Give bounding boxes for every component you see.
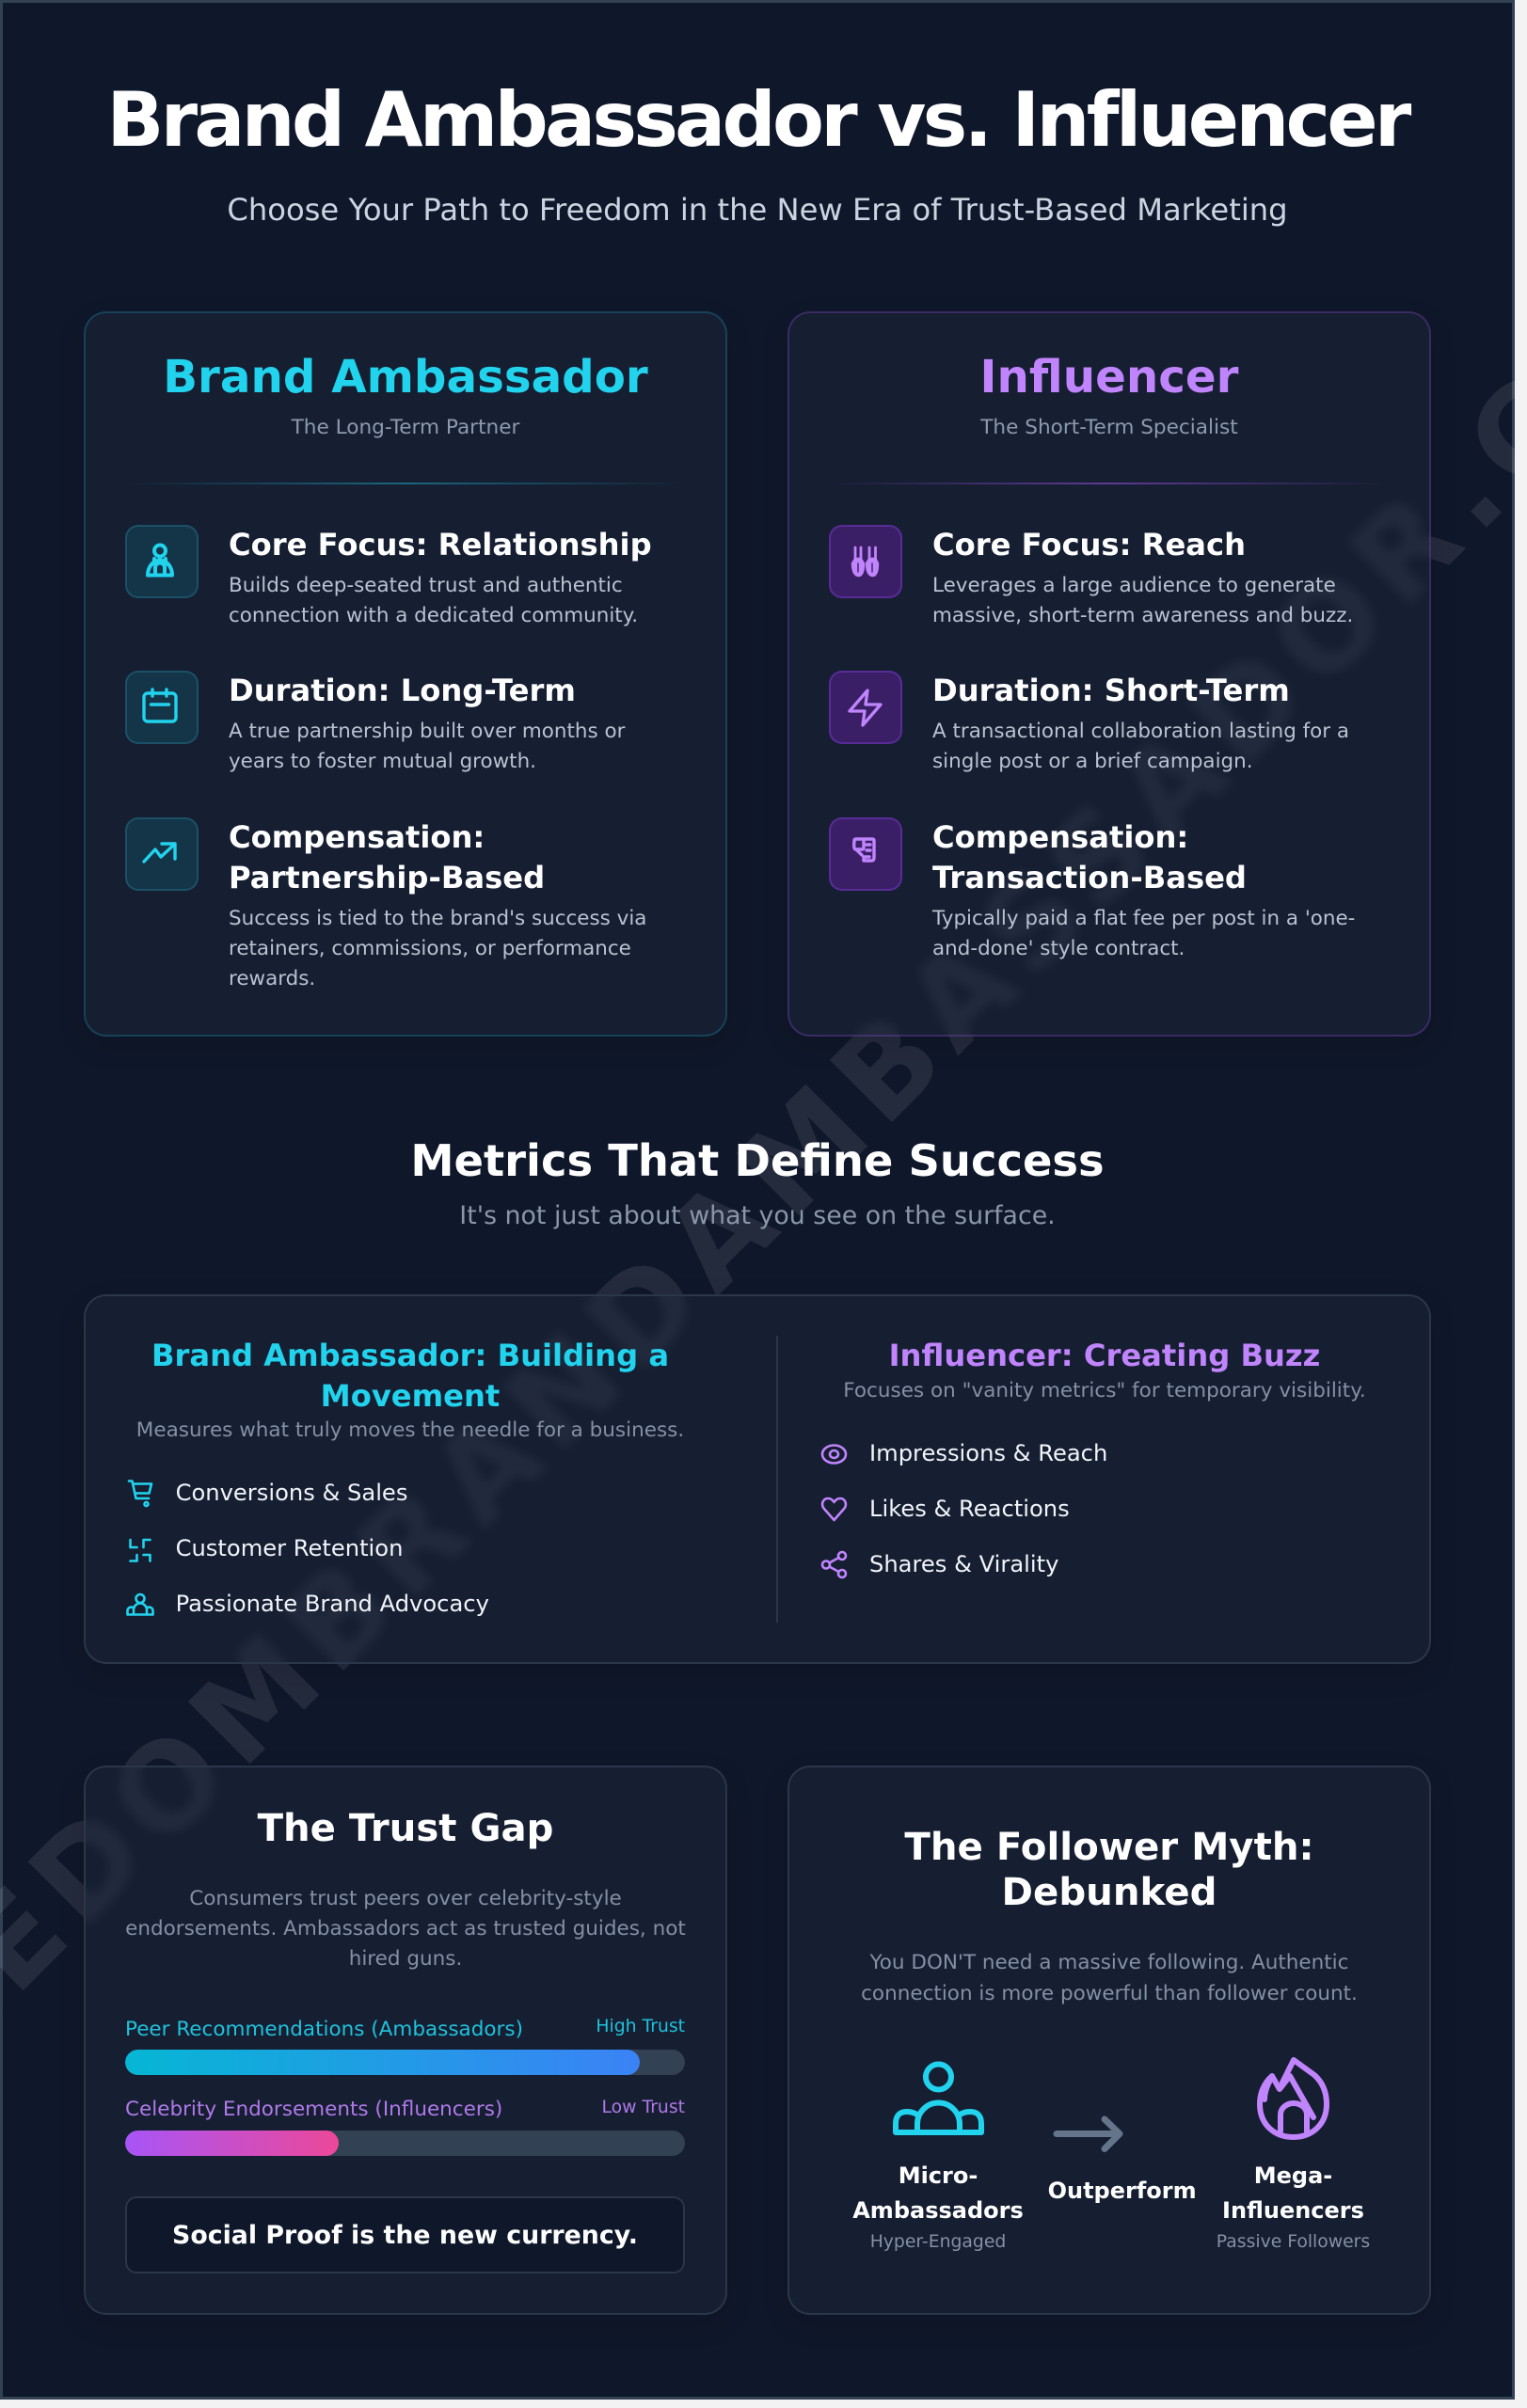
column note: ambassador metrics: Measures what truly moves the needle for a business. xyxy=(136,1418,684,1442)
panel heading: Influencer xyxy=(980,351,1238,404)
icon: mega-influencers xyxy=(1257,2057,1329,2140)
panel text: You DON'T need a massive following. Authentic xyxy=(869,1951,1348,1973)
column heading: influencer metrics: Influencer: Creating Buzz xyxy=(889,1338,1320,1373)
icon: eye xyxy=(820,1444,847,1465)
column note: influencer metrics: Focuses on "vanity metrics" for temporary visibility. xyxy=(843,1379,1366,1402)
panel: trust gap xyxy=(84,1766,727,2315)
icon: heart xyxy=(820,1497,847,1522)
metric: likes xyxy=(820,1496,1070,1522)
item text: duration: A transactional collaboration lasting for a xyxy=(932,719,1349,743)
label: Customer Retention xyxy=(176,1535,403,1561)
item text: core focus: Builds deep-seated trust and authentic xyxy=(229,574,623,596)
label: mega-influencers xyxy=(1222,2162,1364,2224)
item text: compensation: retainers, commissions, or performance xyxy=(229,937,631,959)
panel text: Consumers trust peers over celebrity-style xyxy=(189,1887,622,1910)
label: mega-influencers: Influencers xyxy=(1222,2197,1364,2224)
label: Conversions & Sales xyxy=(176,1480,407,1506)
divider xyxy=(125,483,687,484)
item title: duration: Duration: Long-Term xyxy=(229,673,576,708)
label: micro-ambassadors: Ambassadors xyxy=(852,2197,1024,2224)
item text: core focus xyxy=(932,574,1353,626)
item title: compensation: Transaction-Based xyxy=(932,860,1247,895)
arrow xyxy=(1054,2116,1123,2152)
note: hyper-engaged: Hyper-Engaged xyxy=(870,2232,1006,2252)
callout xyxy=(125,2196,685,2273)
column heading: ambassador metrics xyxy=(151,1338,669,1413)
panel heading xyxy=(904,1825,1314,1914)
icon: lightning bolt xyxy=(829,671,902,744)
item title: compensation: Partnership-Based xyxy=(229,860,545,895)
icon: micro-ambassadors xyxy=(893,2062,984,2135)
label: outperform: Outperform xyxy=(1048,2178,1197,2204)
icon: transaction xyxy=(829,817,902,891)
item title: core focus: Core Focus: Reach xyxy=(932,527,1246,562)
item text: core focus: massive, short-term awareness and buzz. xyxy=(932,604,1353,626)
bar fill: high trust xyxy=(125,2050,640,2075)
panel: influencer xyxy=(787,311,1431,1037)
item text: compensation: and-done' style contract. xyxy=(932,937,1185,959)
label: Impressions & Reach xyxy=(869,1440,1107,1466)
bar: low trust xyxy=(125,2131,685,2156)
bar: high trust xyxy=(125,2050,685,2075)
panel heading: The Trust Gap xyxy=(258,1807,553,1850)
item title: core focus: Core Focus: Relationship xyxy=(229,527,652,562)
panel text: endorsements. Ambassadors act as trusted guides, not xyxy=(125,1917,686,1941)
divider xyxy=(828,483,1390,484)
panel text: hired guns. xyxy=(349,1947,462,1971)
panel heading: Brand Ambassador xyxy=(163,351,648,404)
bar label: celebrity endorsements: Celebrity Endorsements (Influencers) xyxy=(125,2098,502,2121)
callout text: Social Proof is the new currency. xyxy=(172,2221,638,2250)
icon: calendar xyxy=(125,671,199,744)
column heading: ambassador metrics: Movement xyxy=(321,1377,500,1413)
item text: duration xyxy=(932,719,1349,773)
metric: conversions xyxy=(128,1480,407,1507)
bar value: high trust: High Trust xyxy=(596,2017,685,2036)
subtitle: Choose Your Path to Freedom in the New Era of Trust-Based Marketing xyxy=(227,192,1288,228)
section heading: Metrics That Define Success xyxy=(410,1135,1105,1186)
item text: compensation: Success is tied to the brand's success via xyxy=(229,907,646,929)
item text: compensation xyxy=(931,907,1355,959)
icon: people xyxy=(126,1593,154,1616)
label: Shares & Virality xyxy=(869,1551,1058,1577)
label: micro-ambassadors: Micro- xyxy=(899,2162,978,2189)
icon: share xyxy=(820,1550,847,1578)
bar label: peer recommendations: Peer Recommendations (Ambassadors) xyxy=(125,2018,523,2041)
panel text xyxy=(125,1887,686,1971)
item text: duration: single post or a brief campaign. xyxy=(932,749,1253,773)
icon: cart xyxy=(128,1480,152,1507)
metric: shares xyxy=(820,1550,1058,1578)
panel heading: Debunked xyxy=(1002,1870,1217,1914)
metric: retention xyxy=(129,1535,403,1562)
item title: compensation: Compensation: xyxy=(229,819,485,855)
item text: compensation: rewards. xyxy=(229,967,315,990)
item title: compensation xyxy=(229,819,545,895)
panel subheading: The Long-Term Partner xyxy=(292,416,519,438)
panel heading: The Follower Myth: xyxy=(904,1825,1314,1869)
metric: impressions xyxy=(820,1440,1107,1466)
metric: advocacy xyxy=(126,1591,489,1617)
item text: core focus: connection with a dedicated community. xyxy=(229,604,638,626)
note: passive followers: Passive Followers xyxy=(1217,2232,1370,2252)
icon: reach xyxy=(829,525,902,598)
icon: relationship xyxy=(125,525,199,598)
item text: duration: years to foster mutual growth. xyxy=(229,749,536,773)
icon: retention xyxy=(129,1539,151,1562)
panel text: connection is more powerful than follower count. xyxy=(861,1981,1358,2005)
bar value: low trust: Low Trust xyxy=(602,2098,685,2117)
label: mega-influencers: Mega- xyxy=(1254,2162,1332,2189)
label: Likes & Reactions xyxy=(869,1496,1070,1522)
item text: core focus xyxy=(229,574,638,626)
section subheading: It's not just about what you see on the surface. xyxy=(459,1201,1056,1230)
panel: metrics xyxy=(84,1294,1431,1664)
item title: compensation xyxy=(932,819,1247,895)
label: micro-ambassadors xyxy=(852,2162,1024,2224)
item title: duration: Duration: Short-Term xyxy=(932,673,1290,708)
panel subheading: The Short-Term Specialist xyxy=(980,416,1238,438)
icon: trending up xyxy=(125,817,199,891)
item title: compensation: Compensation: xyxy=(932,819,1188,855)
item text: core focus: Leverages a large audience to generate xyxy=(932,574,1336,596)
panel: brand ambassador xyxy=(84,311,727,1037)
item text: compensation xyxy=(229,907,646,990)
divider xyxy=(776,1336,778,1623)
item text: duration xyxy=(229,719,625,773)
item text: duration: A true partnership built over months or xyxy=(229,719,625,743)
panel: follower myth xyxy=(787,1766,1431,2315)
title: Brand Ambassador vs. Influencer xyxy=(106,76,1408,164)
column heading: ambassador metrics: Brand Ambassador: Building a xyxy=(151,1338,669,1373)
panel text xyxy=(861,1951,1358,2005)
label: Passionate Brand Advocacy xyxy=(176,1591,489,1617)
bar fill: low trust xyxy=(125,2131,339,2156)
item text: compensation: Typically paid a flat fee per post in a 'one- xyxy=(932,907,1355,929)
